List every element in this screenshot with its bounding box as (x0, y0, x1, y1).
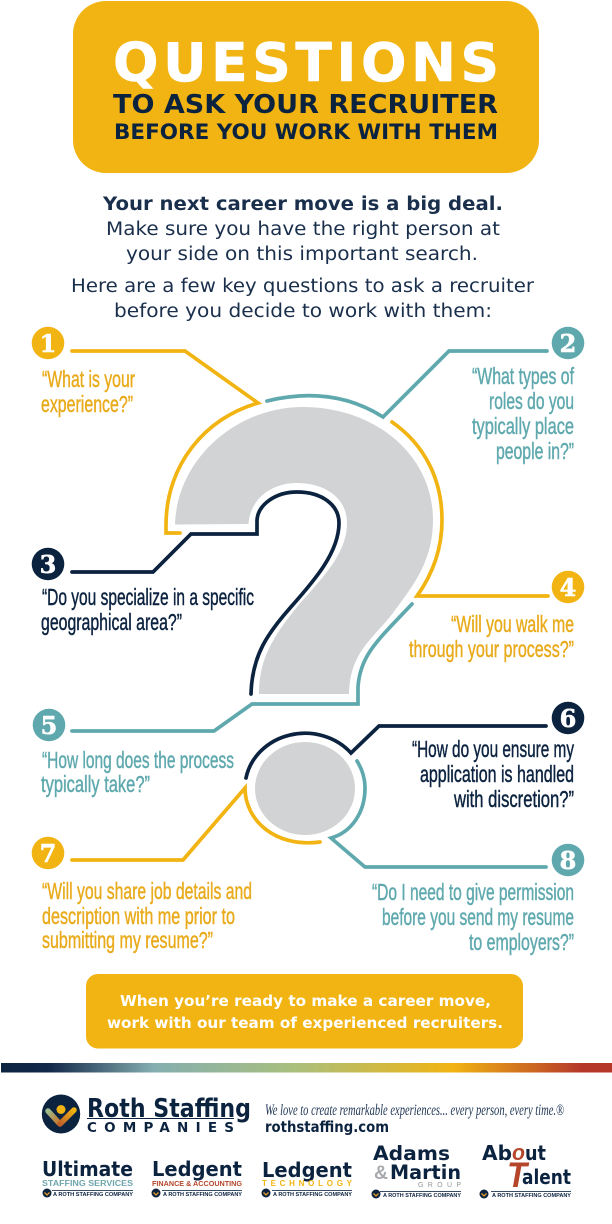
logo: About Talent: A ROTH STAFFING COMPANY (492, 1193, 571, 1199)
logo: About Talent: alent (522, 1165, 571, 1189)
logo: Ledgent Technology: A ROTH STAFFING COMPANY (273, 1192, 352, 1198)
intro text: your side on this important search. (126, 244, 478, 265)
question 8 (372, 879, 574, 955)
question 3: “Do you specialize in a specific (42, 584, 254, 610)
logo: Ultimate Staffing Services: STAFFING SERVICES (42, 1179, 134, 1188)
Roth Staffing Companies logo: COMPANIES (87, 1120, 234, 1136)
badge 8: 8 (560, 846, 576, 875)
logo: Adams and Martin Group: GROUP (418, 1182, 461, 1189)
badge 5: 5 (41, 711, 57, 740)
logo: Ledgent Finance and Accounting: Ledgent (152, 1157, 242, 1181)
question 1: experience?” (41, 391, 133, 417)
logo: About Talent: ut (525, 1141, 546, 1165)
callout 4 (392, 422, 584, 662)
intro text: Your next career move is a big deal. (102, 194, 503, 215)
question 6 (412, 736, 574, 812)
intro text: before you decide to work with them: (114, 301, 492, 322)
badge 8 (552, 844, 584, 876)
logo: Ledgent Technology (262, 1158, 353, 1198)
question 7: “Will you share job details and (42, 878, 252, 904)
logo: Ledgent Technology: TECHNOLOGY (262, 1179, 353, 1188)
logo: About Talent (480, 1140, 571, 1199)
Roth Staffing Companies logo (42, 1094, 251, 1136)
connector 8 (331, 761, 546, 867)
connector 6 (246, 726, 546, 778)
intro text: Make sure you have the right person at (106, 219, 500, 240)
callout 7 (32, 788, 320, 953)
badge 3: 3 (40, 550, 56, 579)
logo: Ultimate Staffing Services: Ultimate (42, 1157, 133, 1181)
callout 1 (32, 327, 258, 533)
question 7: description with me prior to (42, 903, 235, 929)
question 5 (41, 747, 234, 797)
question 3: geographical area?” (41, 609, 182, 635)
logo: About Talent: T (507, 1156, 529, 1195)
call to action box: work with our team of experienced recruiters. (107, 1014, 503, 1032)
header banner (73, 1, 539, 173)
connector 4 (392, 422, 548, 596)
badge 6 (552, 702, 584, 734)
badge 3 (32, 548, 64, 580)
connector 7 (72, 788, 320, 860)
connector 2 (267, 351, 547, 417)
callout 3 (32, 492, 339, 694)
logo: About Talent: Ab (482, 1141, 512, 1165)
call to action box (86, 974, 523, 1048)
connector 1 (72, 351, 258, 533)
logo: Adams and Martin Group: & (374, 1162, 388, 1184)
gradient divider bar (1, 1063, 612, 1072)
logo: Ledgent Technology: Ledgent (262, 1158, 352, 1182)
logo: Ledgent Finance and Accounting (152, 1157, 242, 1198)
question mark hook (175, 407, 433, 694)
badge 1 (32, 327, 64, 359)
badge 2 (552, 327, 584, 359)
badge 7: 7 (40, 839, 56, 868)
question 7: submitting my resume?” (42, 927, 213, 953)
badge 6: 6 (560, 704, 576, 733)
logo icon (42, 1094, 80, 1134)
connector 3 (72, 492, 339, 694)
question 5: “How long does the process (42, 747, 234, 773)
logo: Ledgent Finance and Accounting: A ROTH STAFFING COMPANY (163, 1192, 242, 1198)
logo: Ledgent Finance and Accounting: FINANCE & ACCOUNTING (152, 1179, 242, 1188)
Roth Staffing Companies logo: Roth Staffing (87, 1094, 251, 1124)
question 4 (409, 611, 574, 662)
question 2: roles do you (489, 388, 574, 414)
badge 2: 2 (560, 329, 576, 358)
logo: Ultimate Staffing Services: A ROTH STAFFING COMPANY (53, 1192, 133, 1198)
connector 5 (72, 604, 412, 731)
question 2 (472, 363, 574, 464)
callout 2 (267, 327, 584, 464)
website: rothstaffing.com (265, 1118, 389, 1136)
logo: Adams and Martin Group: A ROTH STAFFING COMPANY (383, 1193, 461, 1199)
title: QUESTIONS: QUESTIONS (113, 31, 499, 94)
call to action box: When you’re ready to make a career move, (120, 992, 491, 1010)
logo: Ultimate Staffing Services (42, 1157, 134, 1198)
callout 6 (246, 702, 584, 812)
callout 8 (331, 761, 584, 955)
question 5: typically take?” (41, 771, 150, 797)
subtitle line 2: BEFORE YOU WORK WITH THEM (114, 120, 498, 144)
callout 5 (33, 604, 412, 797)
question 1: “What is your (42, 366, 135, 392)
question mark graphic (175, 407, 433, 835)
question 2: people in?” (496, 438, 574, 464)
intro text (71, 194, 534, 322)
question 1 (41, 366, 135, 417)
question 3 (41, 584, 254, 635)
subtitle line 1: TO ASK YOUR RECRUITER (113, 90, 498, 120)
logo: Adams and Martin Group (372, 1142, 461, 1199)
question 2: typically place (472, 413, 574, 439)
badge 4: 4 (560, 573, 576, 602)
badge 4 (552, 571, 584, 603)
intro text: Here are a few key questions to ask a recruiter (71, 276, 534, 297)
logo: Adams and Martin Group: Martin (390, 1161, 461, 1184)
logo: About Talent: o (512, 1140, 525, 1165)
badge 5 (33, 709, 65, 741)
badge 7 (32, 837, 64, 869)
question mark dot (255, 742, 355, 835)
logo: Adams and Martin Group: Adams (373, 1142, 450, 1165)
question 7 (42, 878, 252, 953)
badge 1: 1 (40, 329, 56, 358)
